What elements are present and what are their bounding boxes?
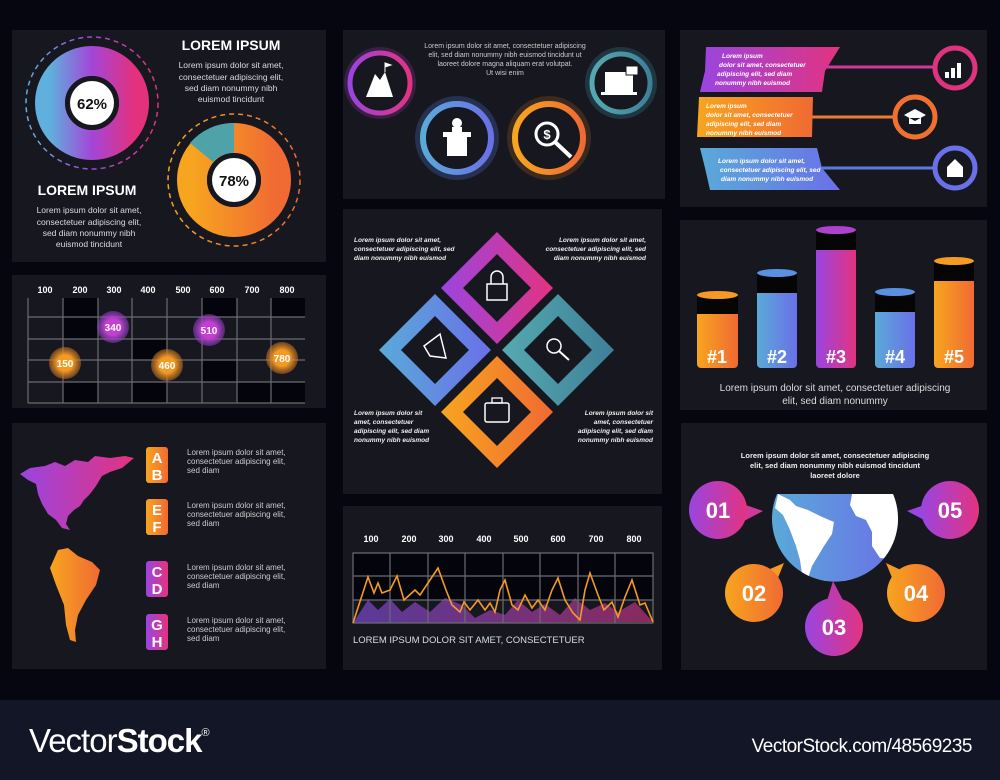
diamond: megaphone bbox=[379, 294, 491, 406]
numbered bubbles: 02 bbox=[742, 581, 766, 606]
bubbles bbox=[49, 311, 298, 381]
axis labels: 400 bbox=[476, 534, 492, 544]
badge texts: sed diam bbox=[187, 466, 220, 475]
caption: Lorem ipsum dolor sit amet, consectetuer adipiscing bbox=[720, 383, 950, 394]
heading top right bbox=[179, 37, 283, 104]
donut 78% bbox=[168, 114, 300, 246]
ribbon 3: Lorem ipsum dolor sit amet, bbox=[718, 158, 805, 165]
numbered bubbles bbox=[689, 481, 979, 656]
icon: laptop bbox=[585, 47, 657, 119]
badge texts: Lorem ipsum dolor sit amet, bbox=[187, 501, 286, 510]
bar 5: #5 bbox=[944, 347, 964, 367]
ribbon 2: adipiscing elit, sed diam bbox=[706, 121, 781, 128]
caption: LOREM IPSUM DOLOR SIT AMET, CONSECTETUER bbox=[353, 635, 585, 646]
numbered bubbles: 05 bbox=[938, 498, 962, 523]
axis labels: 800 bbox=[626, 534, 642, 544]
axis labels: 700 bbox=[588, 534, 604, 544]
donut 78%: 78% bbox=[219, 173, 249, 190]
ribbon 1: nonummy nibh euismod bbox=[715, 80, 791, 87]
axis labels: 500 bbox=[175, 285, 191, 295]
diamond texts: consectetuer adipiscing elit, sed bbox=[546, 246, 647, 253]
ribbon 1 bbox=[700, 47, 975, 92]
intro text: Ut wisi enim bbox=[486, 70, 524, 77]
diamond texts: diam nonummy nibh euismod bbox=[354, 255, 447, 262]
bubbles: 460 bbox=[159, 361, 176, 372]
intro text: Lorem ipsum dolor sit amet, consectetuer adipiscing bbox=[424, 43, 586, 50]
bar 4: #4 bbox=[885, 347, 905, 367]
panel: icon circles bbox=[343, 30, 665, 199]
footer: VectorStock bbox=[29, 722, 201, 759]
intro text: laoreet dolore magna aliquam erat volutpat. bbox=[437, 61, 573, 68]
diamond texts: consectetuer adipiscing elit, sed bbox=[354, 246, 455, 253]
diamond texts: nonummy nibh euismod bbox=[578, 437, 654, 444]
panel: line chart bbox=[343, 506, 662, 670]
intro text: Lorem ipsum dolor sit amet, consectetuer adipiscing bbox=[741, 451, 930, 460]
badge texts: sed diam bbox=[187, 519, 220, 528]
bubbles: 780 bbox=[274, 354, 291, 365]
diamond texts: diam nonummy nibh euismod bbox=[554, 255, 647, 262]
axis labels: 800 bbox=[279, 285, 295, 295]
badges: H bbox=[152, 634, 162, 651]
heading bottom left: LOREM IPSUM bbox=[38, 182, 136, 198]
axis labels bbox=[37, 285, 295, 295]
heading bottom left: sed diam nonummy nibh bbox=[43, 228, 136, 238]
diamond texts: amet, consectetuer bbox=[594, 419, 653, 426]
heading bottom left: Lorem ipsum dolor sit amet, bbox=[37, 205, 141, 215]
caption: elit, sed diam nonummy bbox=[782, 396, 888, 407]
diamond texts: amet, consectetuer bbox=[354, 419, 414, 426]
axis labels: 600 bbox=[209, 285, 225, 295]
ribbon 3: diam nonummy nibh euismod bbox=[721, 176, 814, 183]
bar 3: #3 bbox=[826, 347, 846, 367]
ribbon 1: Lorem ipsum bbox=[722, 53, 763, 60]
numbered bubbles: 01 bbox=[706, 498, 730, 523]
ribbon 3 bbox=[700, 148, 975, 190]
badges: D bbox=[152, 581, 163, 598]
badge texts: consectetuer adipiscing elit, bbox=[187, 572, 285, 581]
diamond texts bbox=[354, 237, 654, 444]
badge texts: Lorem ipsum dolor sit amet, bbox=[187, 616, 286, 625]
axis labels: 400 bbox=[140, 285, 156, 295]
badges: G bbox=[151, 617, 163, 634]
axis labels: 100 bbox=[363, 534, 379, 544]
intro text: elit, sed diam nonummy nibh euismod tincidunt bbox=[750, 461, 921, 470]
ribbon 2 bbox=[697, 97, 935, 137]
numbered bubbles: 03 bbox=[822, 615, 846, 640]
diamond texts: Lorem ipsum dolor sit bbox=[354, 410, 423, 417]
badges: F bbox=[152, 519, 162, 536]
badge texts: sed diam bbox=[187, 634, 220, 643]
panel: diamonds bbox=[343, 209, 662, 494]
bubbles: 150 bbox=[57, 359, 74, 370]
axis labels: 200 bbox=[401, 534, 417, 544]
heading top right: LOREM IPSUM bbox=[182, 37, 280, 53]
line bbox=[353, 568, 653, 623]
diamond: search bbox=[502, 294, 614, 406]
footer bbox=[0, 700, 1000, 780]
panel: donut charts bbox=[12, 30, 326, 262]
badge texts: sed diam bbox=[187, 581, 220, 590]
axis labels: 700 bbox=[244, 285, 260, 295]
heading bottom left: euismod tincidunt bbox=[56, 239, 123, 249]
heading top right: sed diam nonummy nibh bbox=[185, 83, 278, 93]
ribbon 2: dolor sit amet, consectetuer bbox=[706, 112, 793, 119]
bar 4 bbox=[875, 288, 915, 368]
heading top right: Lorem ipsum dolor sit amet, bbox=[179, 60, 283, 70]
panel: bubble grid bbox=[12, 275, 326, 408]
diamond: briefcase bbox=[441, 356, 553, 468]
footer: VectorStock.com/48569235 bbox=[752, 736, 972, 757]
badge texts: Lorem ipsum dolor sit amet, bbox=[187, 563, 286, 572]
ribbon 3: consectetuer adipiscing elit, sed bbox=[720, 167, 821, 174]
intro text: elit, sed diam nonummy nibh euismod tincidunt ut bbox=[428, 52, 582, 59]
axis labels: 300 bbox=[438, 534, 454, 544]
diamond texts: Lorem ipsum dolor sit amet, bbox=[354, 237, 441, 244]
ribbon 1: adipiscing elit, sed diam bbox=[717, 71, 792, 78]
ribbon 1: dolor sit amet, consectetuer bbox=[719, 62, 806, 69]
badge texts: consectetuer adipiscing elit, bbox=[187, 457, 285, 466]
badge texts: consectetuer adipiscing elit, bbox=[187, 510, 285, 519]
diamond texts: adipiscing elit, sed diam bbox=[578, 428, 653, 435]
diamond texts: nonummy nibh euismod bbox=[354, 437, 430, 444]
axis labels: 200 bbox=[72, 285, 88, 295]
heading top right: consectetuer adipiscing elit, bbox=[179, 72, 283, 82]
icon: money search bbox=[507, 96, 591, 180]
bar 2 bbox=[757, 269, 797, 368]
bar 2: #2 bbox=[767, 347, 787, 367]
footer: ® bbox=[201, 727, 209, 739]
badges: C bbox=[152, 564, 163, 581]
bar 3 bbox=[816, 226, 856, 368]
badges: E bbox=[152, 502, 162, 519]
bubbles: 510 bbox=[201, 326, 218, 337]
donut 62%: 62% bbox=[77, 96, 107, 113]
globe bbox=[772, 494, 898, 582]
badges bbox=[146, 447, 168, 651]
ribbon 2: Lorem ipsum bbox=[706, 103, 747, 110]
panel: globe bbox=[681, 423, 987, 670]
badge texts: Lorem ipsum dolor sit amet, bbox=[187, 448, 286, 457]
axis labels: 500 bbox=[513, 534, 529, 544]
badges: A bbox=[152, 450, 163, 467]
badge texts: consectetuer adipiscing elit, bbox=[187, 625, 285, 634]
badges: B bbox=[152, 467, 163, 484]
badge texts bbox=[187, 448, 286, 643]
diamond texts: Lorem ipsum dolor sit bbox=[585, 410, 654, 417]
numbered bubbles: 04 bbox=[904, 581, 929, 606]
axis labels: 300 bbox=[106, 285, 122, 295]
map: south america bbox=[50, 548, 100, 642]
icon: mountain bbox=[344, 47, 416, 119]
bubbles: 340 bbox=[105, 323, 122, 334]
heading bottom left: consectetuer adipiscing elit, bbox=[37, 217, 141, 227]
map: north america bbox=[20, 456, 134, 530]
bar 5 bbox=[934, 257, 974, 368]
ribbon 2: nonummy nibh euismod bbox=[706, 130, 782, 137]
intro text: laoreet dolore bbox=[810, 471, 860, 480]
icon: podium bbox=[415, 96, 499, 180]
panel: maps bbox=[12, 423, 326, 669]
area bbox=[353, 598, 653, 623]
bar 1 bbox=[697, 291, 738, 368]
axis labels bbox=[363, 534, 642, 544]
panel: ribbons bbox=[680, 30, 987, 207]
bar 1: #1 bbox=[707, 347, 727, 367]
diamond: lock bbox=[441, 232, 553, 344]
diamond texts: adipiscing elit, sed diam bbox=[354, 428, 429, 435]
panel: cylinder bar chart bbox=[680, 220, 987, 410]
donut 62% bbox=[26, 37, 158, 169]
axis labels: 100 bbox=[37, 285, 53, 295]
diamond texts: Lorem ipsum dolor sit amet, bbox=[559, 237, 646, 244]
heading top right: euismod tincidunt bbox=[198, 94, 265, 104]
icon: money search: $ bbox=[543, 127, 551, 142]
axis labels: 600 bbox=[550, 534, 566, 544]
heading bottom left bbox=[37, 182, 141, 249]
